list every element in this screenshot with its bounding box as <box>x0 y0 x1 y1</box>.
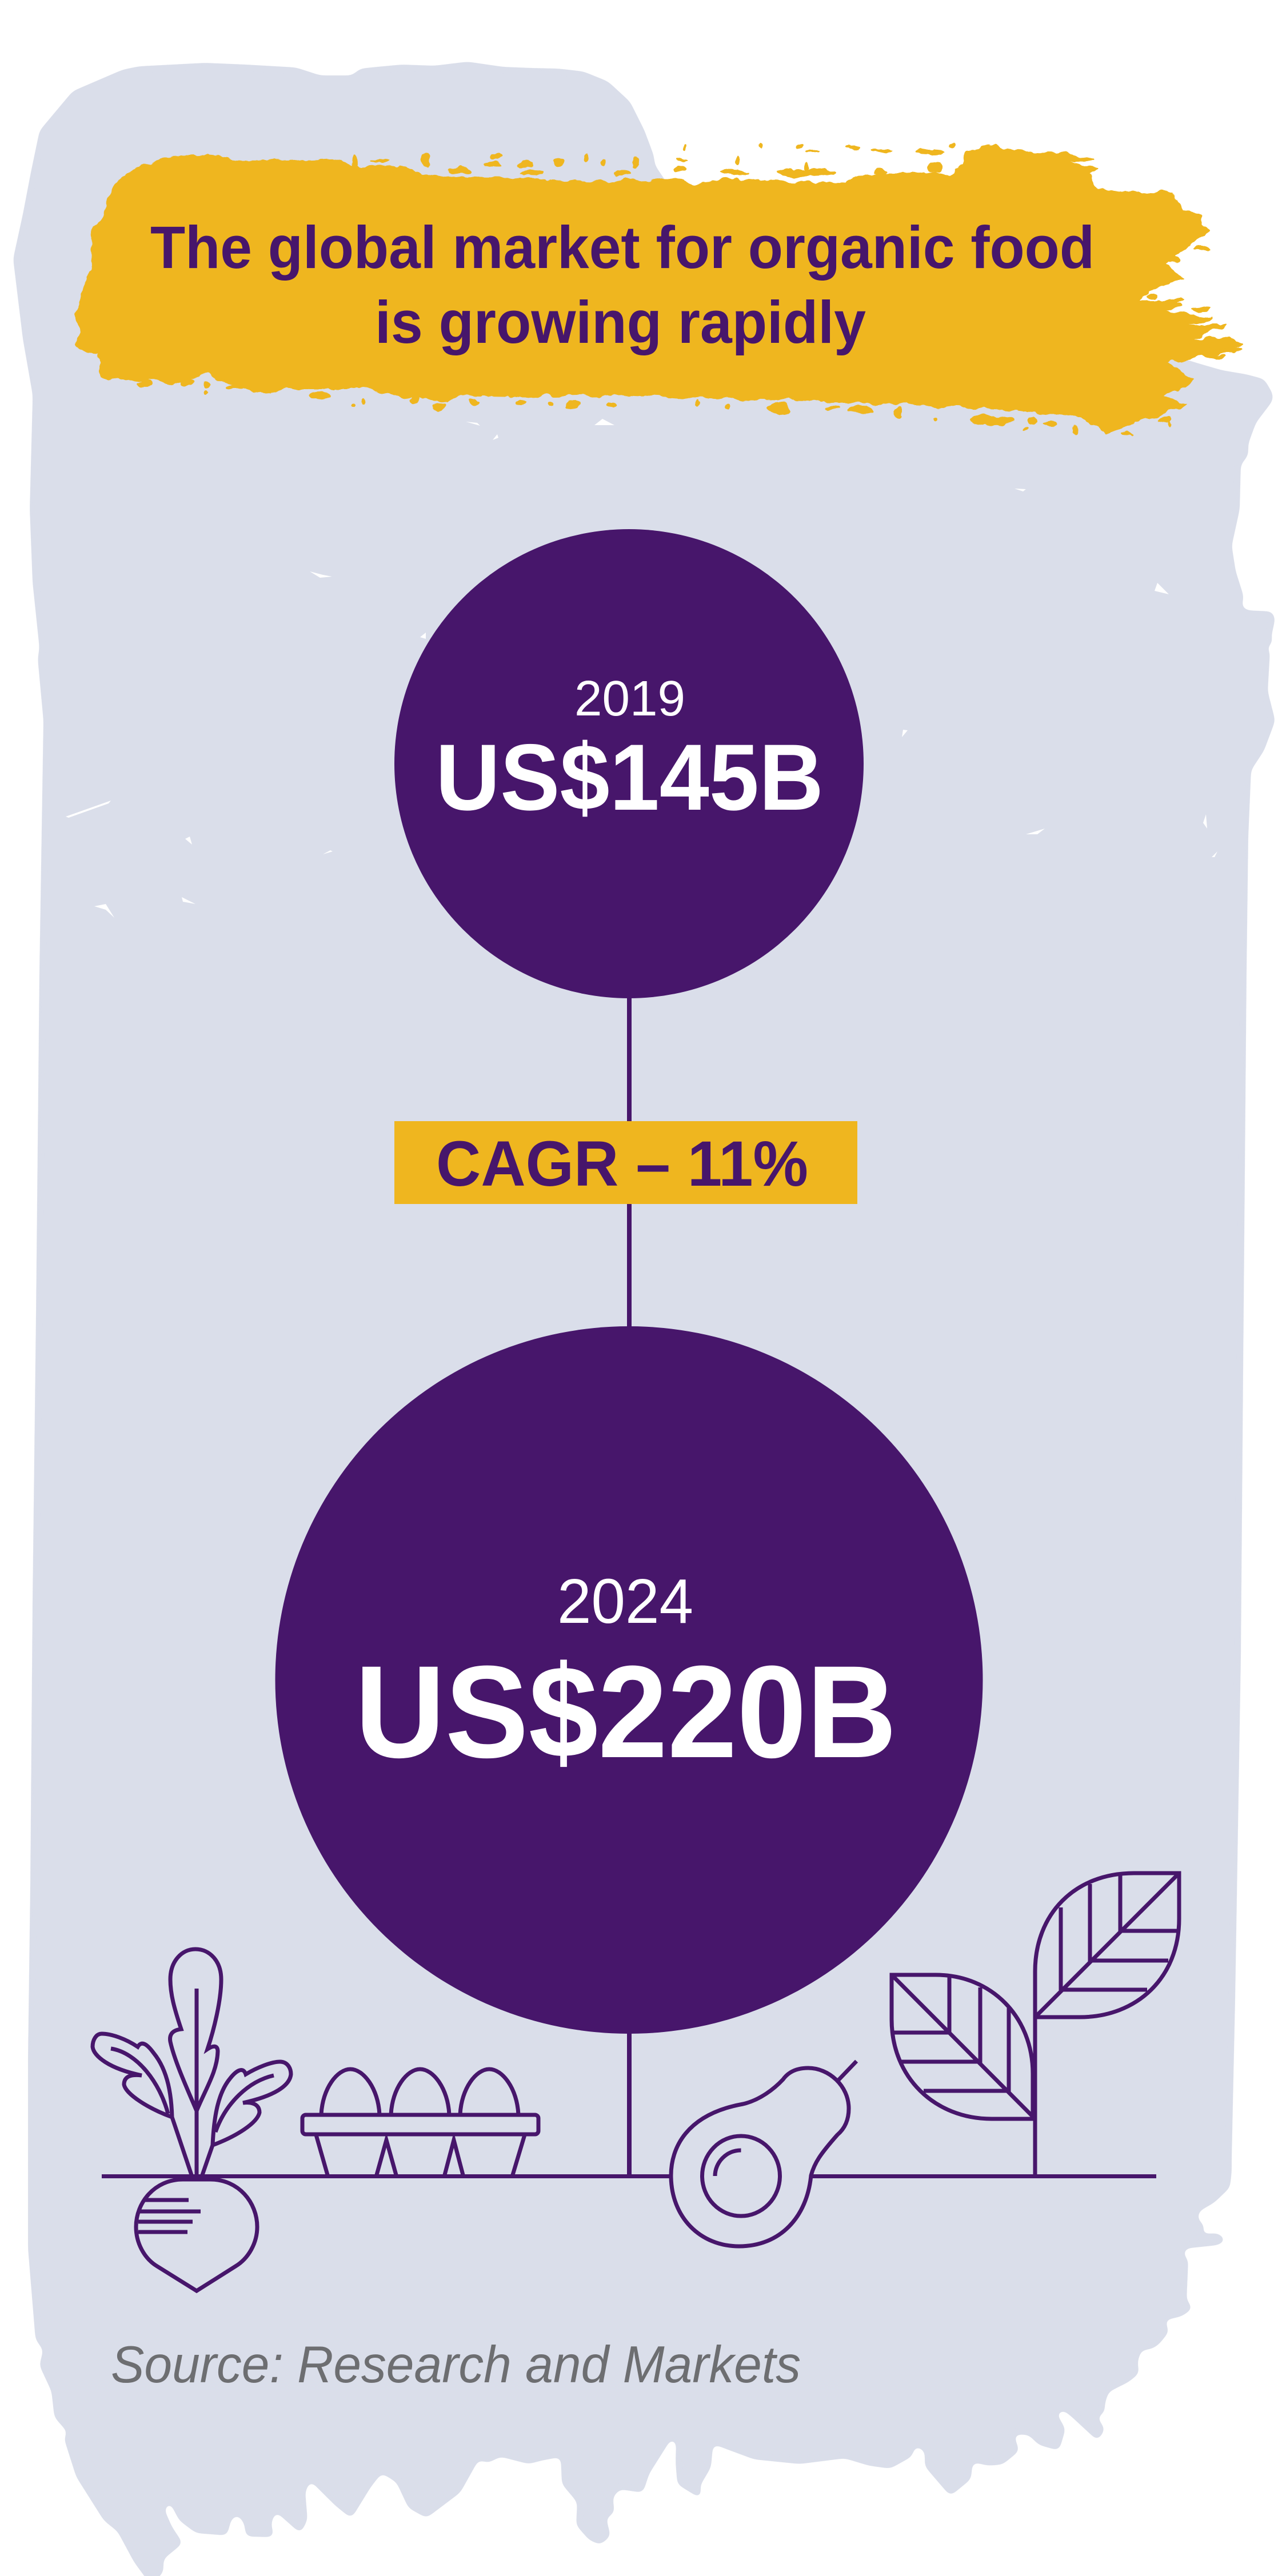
circle: 2024 value: US$220B <box>355 1638 897 1785</box>
yellow title brush stroke <box>75 142 1243 435</box>
source note: Source: Research and Markets <box>111 2335 801 2393</box>
connector line <box>627 971 632 2177</box>
circle: 2024 value <box>275 1326 983 2034</box>
circle: 2019 value: US$145B <box>436 725 824 830</box>
icon: avocado <box>671 2061 857 2246</box>
title: The global market for organic food <box>150 214 1095 281</box>
CAGR label: CAGR – 11% <box>436 1128 808 1199</box>
circle: 2024 value: 2024 <box>557 1567 693 1637</box>
circle: 2019 value <box>394 529 864 998</box>
icon: beetroot <box>93 1949 291 2291</box>
icon: egg carton <box>302 2069 538 2175</box>
ground line <box>102 2174 1156 2178</box>
icon: plant with two leaves <box>892 1873 1179 2175</box>
CAGR label <box>394 1121 857 1204</box>
title <box>150 214 1095 356</box>
title: is growing rapidly <box>375 289 866 356</box>
circle: 2019 value: 2019 <box>574 671 685 726</box>
